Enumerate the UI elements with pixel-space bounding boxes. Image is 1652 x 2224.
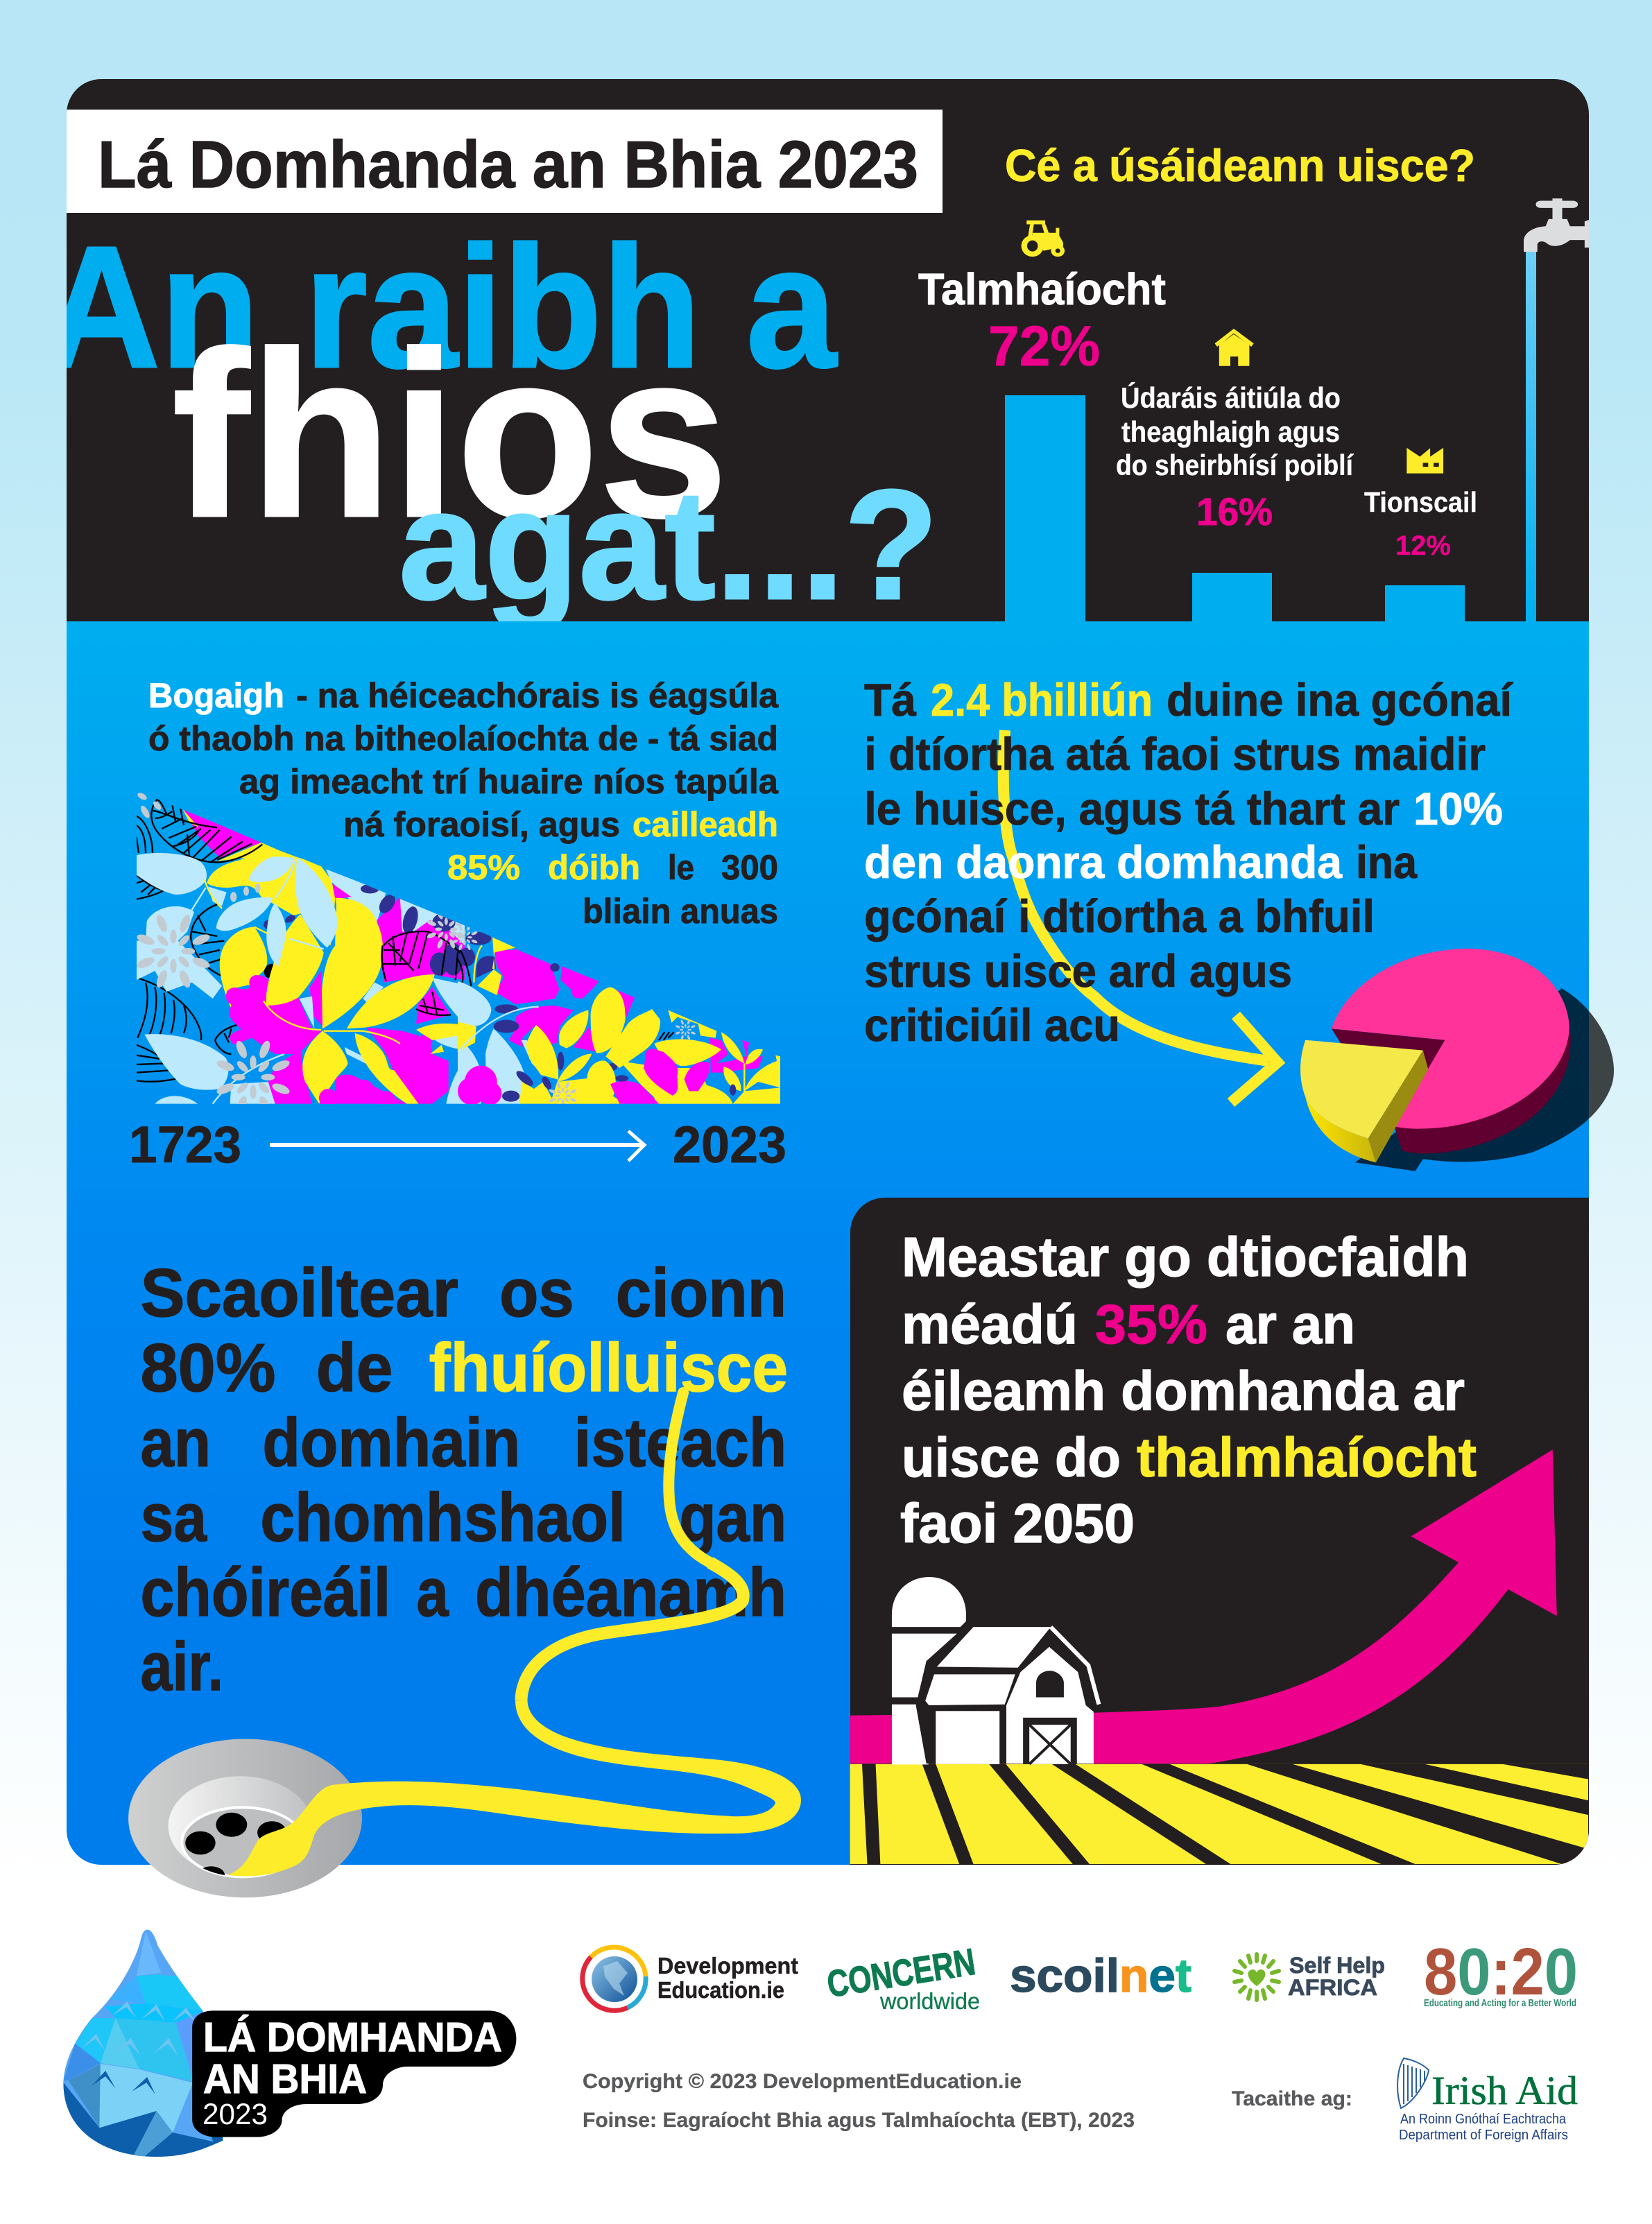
icon: barn and silo — [892, 1577, 1103, 1764]
logo: 80:20: Educating and Acting for a Better World — [1424, 1997, 1576, 2009]
text: Bogaigh wetlands: 300 — [721, 848, 778, 887]
logo text: 2023 — [203, 2098, 268, 2131]
text: wastewater: domhain — [262, 1404, 520, 1481]
logo: Concern Worldwide — [824, 1941, 980, 2014]
text: copyright and source: Foinse: Eagraíocht Bhia agus Talmhaíochta (EBT), 2023 — [583, 2109, 1135, 2132]
text: water stress: i dtíortha atá faoi strus maidir — [864, 728, 1486, 779]
logo: Development Education: Development — [657, 1953, 798, 1979]
icon: tap with running water — [1524, 198, 1590, 622]
logo: Irish Aid — [1397, 2058, 1578, 2143]
text: Bogaigh wetlands: - na héiceachórais is éagsúla — [296, 676, 779, 715]
logo: Development Education: Education.ie — [657, 1977, 784, 2003]
logo: Scoilnet: scoilnet — [1010, 1949, 1191, 2002]
logo: Irish Aid: An Roinn Gnóthaí Eachtracha — [1400, 2112, 1567, 2127]
title banner — [67, 110, 943, 213]
magenta top strip — [182, 809, 261, 858]
magenta right mass — [377, 897, 465, 983]
foliage: left section — [135, 791, 466, 1115]
text: water stress: criticiúil acu — [864, 999, 1120, 1051]
text: water stress: le huisce, agus tá thart ar — [864, 783, 1400, 834]
text: wastewater — [141, 1255, 788, 1705]
text: Bogaigh wetlands: le — [668, 848, 694, 887]
icon: tractor — [1022, 221, 1065, 257]
headline: An raibh a fhios agat...?: fhios — [172, 303, 728, 567]
navy shapes — [459, 932, 617, 1092]
label: households 16%: do sheirbhísí poiblí — [1116, 449, 1354, 481]
bar: agriculture — [1005, 395, 1085, 622]
chart: 3D pie — [1300, 949, 1614, 1171]
bar: industry — [1385, 585, 1465, 622]
navy over yellow — [502, 1069, 736, 1102]
text: water stress — [864, 674, 1514, 1051]
yellow leaves — [458, 938, 780, 1104]
navy leaves — [261, 884, 463, 981]
yellow leaves — [207, 850, 383, 1028]
top dark panel — [67, 79, 1589, 627]
label: households 16% — [1116, 381, 1354, 533]
headline: An raibh a fhios agat...? — [67, 240, 931, 621]
label: Talmhaíocht 72% — [918, 272, 1166, 366]
text: wastewater: dhéanamh — [475, 1554, 786, 1630]
logo: Development Education — [583, 1947, 798, 2010]
text: Bogaigh wetlands: cailleadh — [633, 805, 778, 844]
label: Talmhaíocht 72%: Talmhaíocht — [918, 264, 1166, 314]
black line leaf over magenta — [382, 931, 465, 1015]
icon: drain with yellow stream — [128, 1393, 801, 1897]
foliage: right section — [451, 924, 780, 1110]
arrow: curved arrow to pie chart — [1004, 730, 1277, 1103]
text: Bogaigh wetlands: 85% — [447, 848, 520, 887]
chart: water use bars — [918, 221, 1477, 622]
illustration: shrinking wetland foliage — [135, 791, 780, 1115]
label: industry 12%: Tionscail — [1364, 486, 1477, 518]
pale shapes — [458, 981, 536, 1104]
logo: Self Help Africa: AFRICA — [1288, 1975, 1377, 2000]
text: wastewater: Scaoiltear — [141, 1255, 458, 1331]
text: wastewater: os — [499, 1255, 574, 1331]
text: 35% demand: uisce do — [902, 1426, 1121, 1488]
text: Bogaigh wetlands — [148, 676, 779, 931]
text: wastewater: 80% — [141, 1329, 275, 1406]
headline: An raibh a fhios agat...?: An raibh a — [43, 210, 838, 404]
text: supported by: Tacaithe ag: — [1232, 2087, 1352, 2110]
text: 35% demand: ar an — [1225, 1293, 1355, 1355]
logo: Concern Worldwide: CONCERN — [824, 1941, 978, 2006]
text: Bogaigh wetlands: ó thaobh na bitheolaíochta de - tá siad — [148, 719, 778, 758]
text: 35% demand: faoi 2050 — [900, 1492, 1135, 1554]
text: Bogaigh wetlands: ná foraoisí, agus — [343, 805, 620, 844]
title banner: Lá Domhanda an Bhia 2023 — [98, 128, 918, 202]
label: Talmhaíocht 72%: 72% — [988, 315, 1100, 378]
magenta lower bloom over yellow — [319, 1053, 446, 1110]
logo: Self Help Africa — [1234, 1953, 1385, 2000]
text: water stress: duine ina gcónaí — [1167, 674, 1514, 725]
text: water stress: strus uisce ard agus — [864, 945, 1292, 997]
magenta blooms — [226, 971, 451, 1104]
label: households 16%: Údaráis áitiúla do — [1121, 381, 1341, 414]
text: wastewater: a — [417, 1554, 449, 1630]
label shape — [192, 2010, 516, 2137]
text: wastewater: chomhshaol — [260, 1479, 626, 1555]
arrow: rising demand — [850, 1449, 1557, 1764]
panel: blue body — [67, 621, 1589, 1865]
text: 35% demand: éileamh domhanda ar — [902, 1360, 1465, 1422]
text: copyright and source: Copyright © 2023 DevelopmentEducation.ie — [583, 2070, 1022, 2093]
text: Bogaigh wetlands: Bogaigh — [148, 676, 284, 715]
drain — [128, 1739, 362, 1897]
pale blue leaves — [137, 853, 465, 1104]
text: Bogaigh wetlands: ag imeacht trí huaire níos tapúla — [239, 762, 779, 801]
pale top leaves — [266, 858, 338, 966]
black arcs — [458, 950, 674, 1040]
text: wastewater: air. — [141, 1628, 223, 1705]
icon: house — [1215, 329, 1254, 366]
black line leaves under — [137, 800, 262, 1082]
fine stems — [171, 859, 400, 1104]
magenta over yellow — [458, 1049, 710, 1105]
icon: faceted water drop — [55, 1923, 516, 2159]
text: 35% demand — [900, 1226, 1477, 1554]
label: industry 12%: 12% — [1395, 531, 1451, 561]
text: 35% demand: méadú — [902, 1293, 1078, 1355]
text: water stress: den daonra domhanda — [864, 836, 1343, 888]
yellow field — [850, 1764, 1588, 1864]
text: water stress: 10% — [1413, 783, 1503, 834]
text: water stress: gcónaí i dtíortha a bhfuil — [864, 890, 1375, 942]
text: 35% demand: thalmhaíocht — [1137, 1426, 1477, 1488]
text: Bogaigh wetlands: dóibh — [548, 848, 640, 887]
text: wastewater: de — [316, 1329, 393, 1406]
logo: Irish Aid: Irish Aid — [1431, 2068, 1578, 2113]
headline: An raibh a fhios agat...?: agat...? — [399, 457, 938, 632]
bar: households — [1192, 573, 1272, 622]
text: wastewater: gan — [679, 1479, 786, 1555]
logo text — [203, 2015, 502, 2131]
text: Bogaigh wetlands: bliain anuas — [583, 892, 778, 931]
text: 35% demand: Meastar go dtiocfaidh — [902, 1226, 1469, 1288]
text: wastewater: an — [141, 1404, 211, 1481]
timeline: 1723 to 2023: 2023 — [673, 1116, 786, 1173]
logo: World Food Day 2023 — [55, 1923, 516, 2159]
label: households 16%: 16% — [1196, 490, 1273, 533]
heading: who uses water: Cé a úsáideann uisce? — [1005, 140, 1475, 191]
pale hypotenuse patch — [326, 869, 386, 922]
text: wastewater: cionn — [616, 1255, 786, 1331]
magenta masses — [494, 949, 763, 1073]
label: industry 12% — [1364, 491, 1476, 555]
label: households 16%: theaghlaigh agus — [1121, 415, 1340, 448]
panel: farm demand — [850, 1198, 1589, 1865]
text: water stress: ina — [1356, 836, 1418, 888]
logo: 80:20: 80:20 — [1424, 1935, 1578, 2009]
fine stems — [458, 945, 744, 1101]
timeline: 1723 to 2023 — [129, 1116, 786, 1173]
logo text: LÁ DOMHANDA — [203, 2015, 502, 2060]
text: copyright and source — [583, 2070, 1135, 2132]
logo: Self Help Africa: Self Help — [1289, 1953, 1385, 1978]
yellow upper leaves — [266, 914, 465, 1104]
text: water stress: Tá — [864, 674, 916, 725]
text: 35% demand: 35% — [1095, 1293, 1207, 1355]
logo: Irish Aid: Department of Foreign Affairs — [1399, 2128, 1568, 2143]
text: water stress: 2.4 bhilliún — [931, 674, 1153, 725]
timeline: 1723 to 2023: 1723 — [129, 1116, 241, 1173]
grey flowers — [451, 924, 696, 1110]
yellow wastewater stream — [228, 1393, 801, 1877]
logo text: AN BHIA — [203, 2056, 367, 2102]
text: wastewater: chóireáil — [141, 1554, 390, 1630]
text: wastewater: sa — [141, 1479, 207, 1555]
grey flowers — [135, 791, 466, 1115]
text: wastewater: fhuíolluisce — [429, 1329, 788, 1406]
text: wastewater: isteach — [574, 1404, 786, 1481]
main card — [43, 79, 1590, 1865]
logo: Concern Worldwide: worldwide — [879, 1988, 980, 2014]
icon: factory — [1406, 448, 1443, 474]
